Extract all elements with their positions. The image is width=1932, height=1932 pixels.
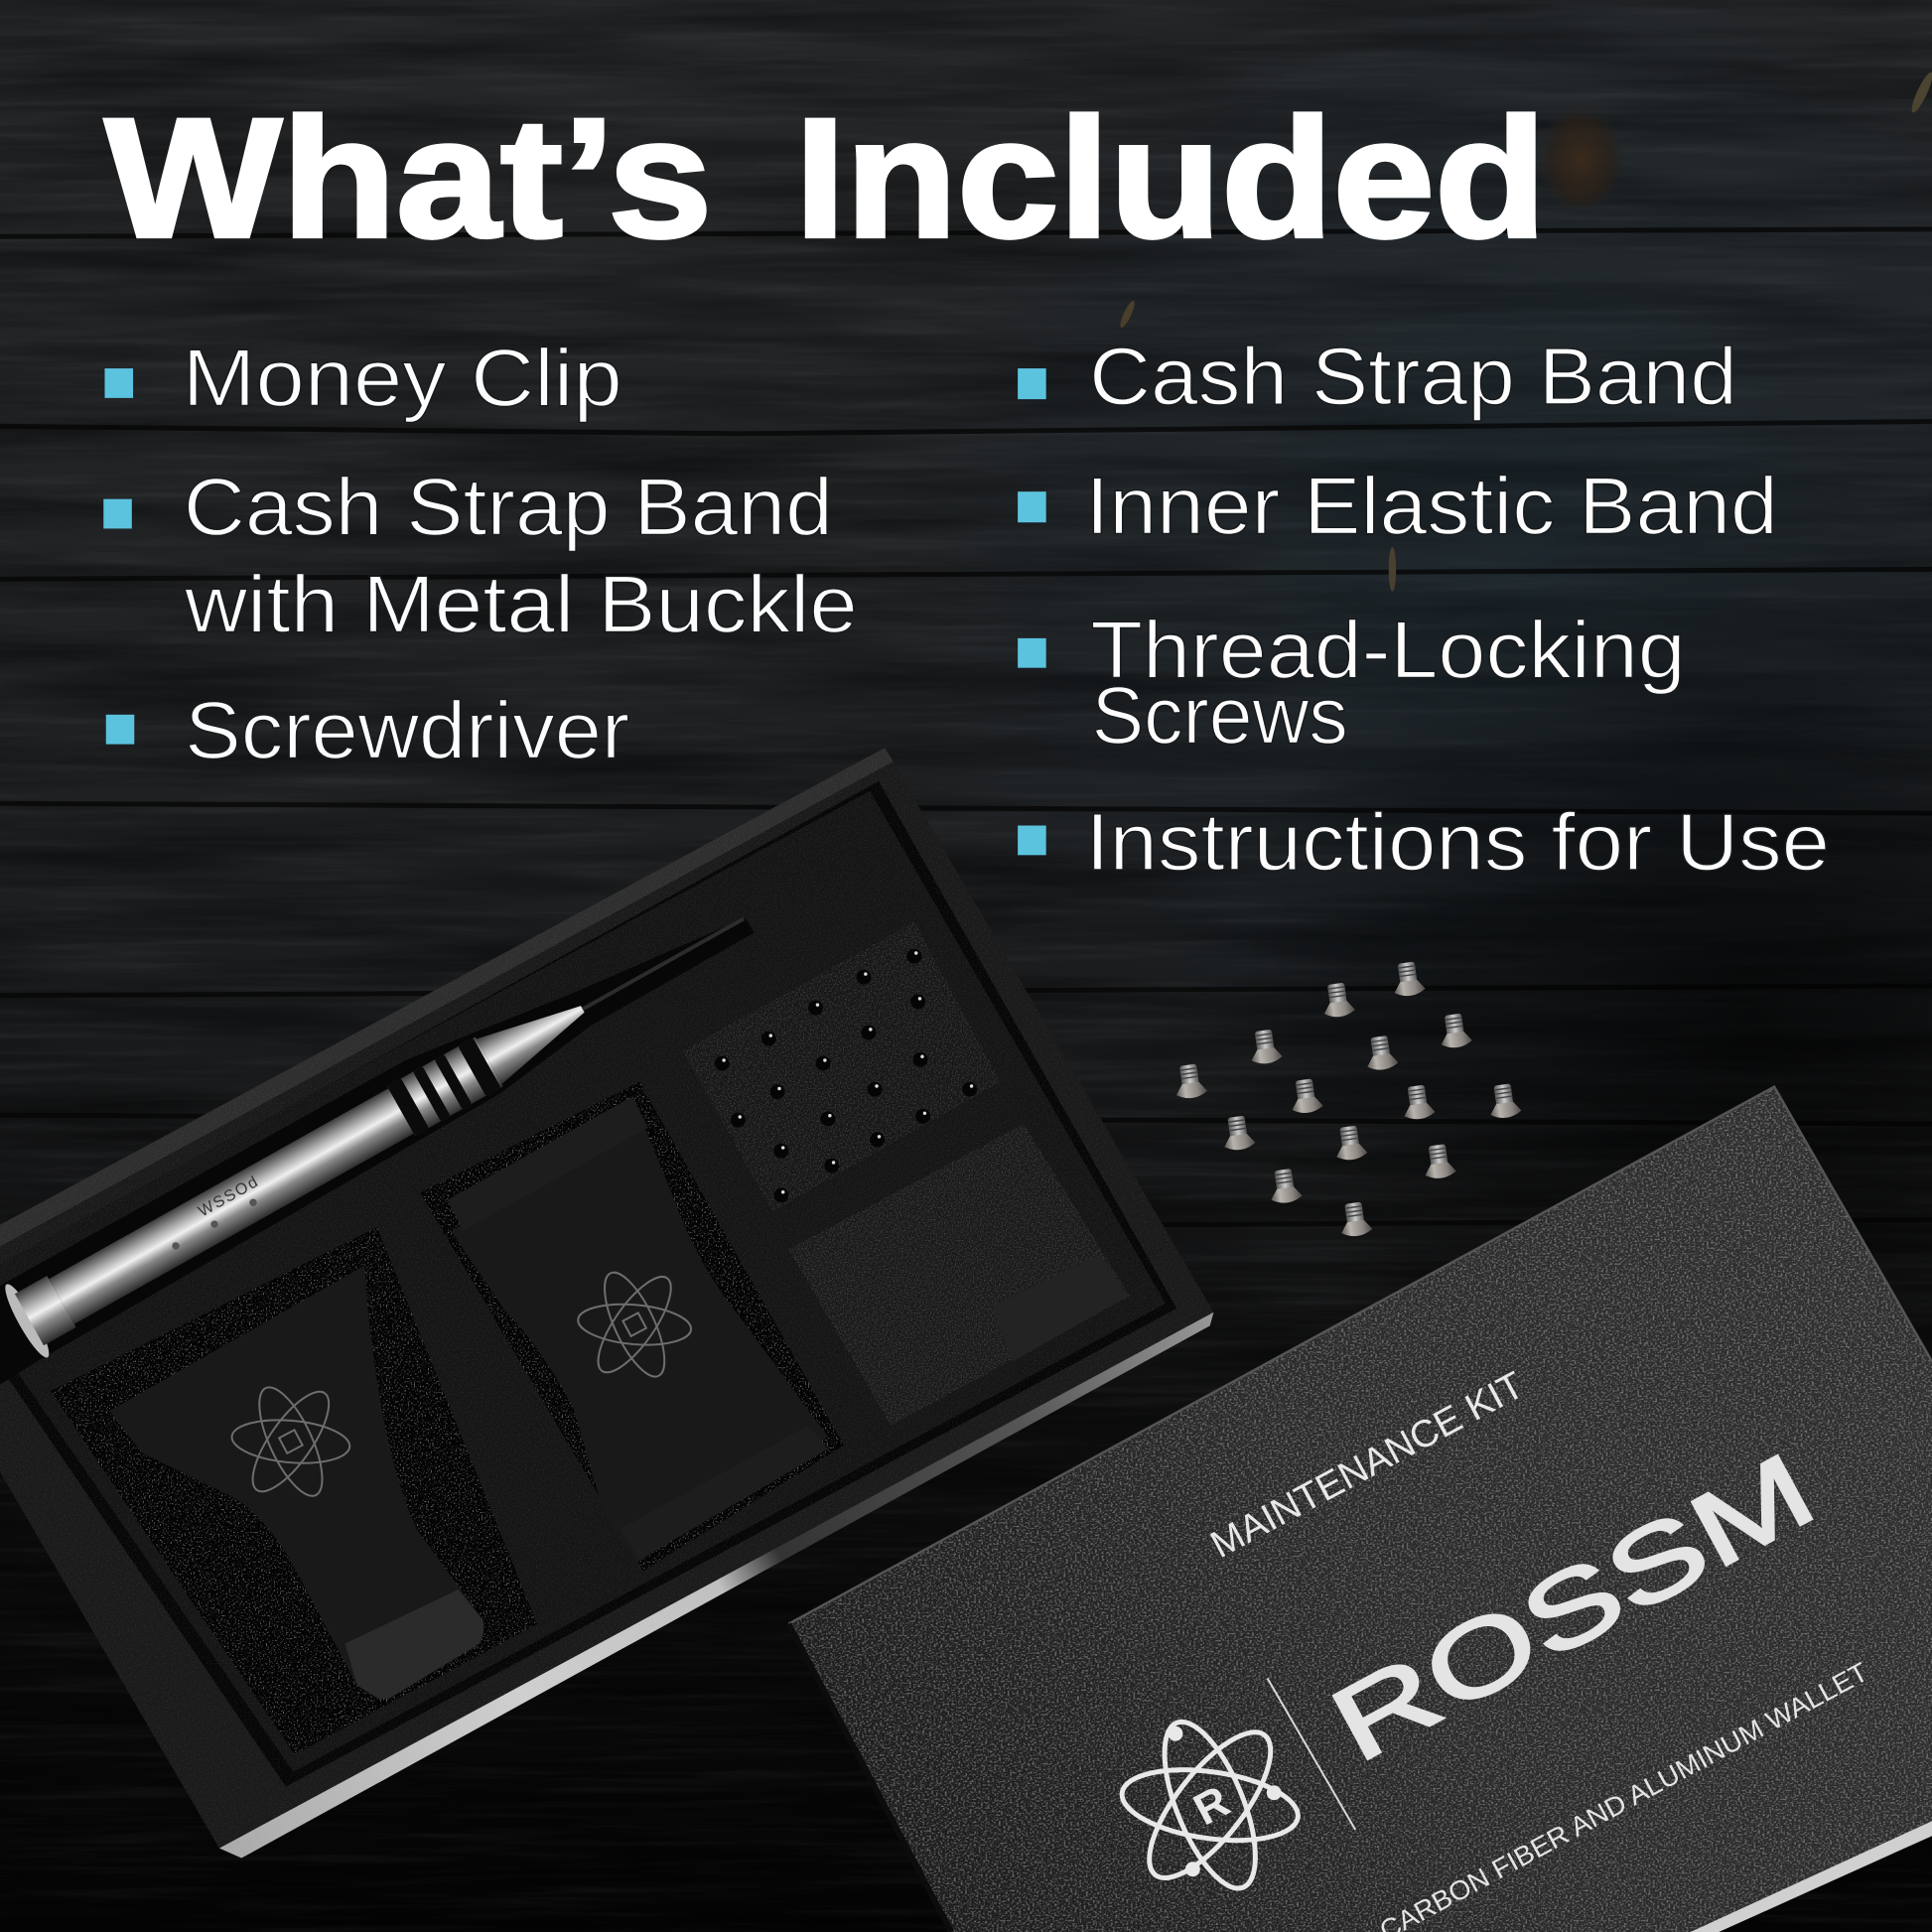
screwdriver slot — [0, 918, 755, 1392]
lid logo: wordmark: ROSSM — [1313, 1432, 1833, 1784]
cash strap bottom band — [620, 1426, 828, 1560]
item: Cash Strap Band: Cash Strap Band — [1089, 332, 1737, 422]
item: Cash Strap Band with Metal Buckle — [103, 463, 858, 650]
glitter foam — [50, 1072, 850, 1762]
item: Cash Strap Band with Metal Buckle: with Metal Buckle — [184, 560, 858, 650]
item: Instructions for Use: Instructions for Use — [1085, 797, 1830, 888]
lid atom logo — [1118, 1711, 1303, 1900]
dotted grip pad studs — [715, 949, 977, 1202]
money clip 2 — [448, 1097, 828, 1564]
money clip 1 — [109, 1266, 483, 1699]
engraved model text: WSSOd — [196, 1173, 262, 1220]
fabric texture — [444, 918, 1134, 1571]
item: Thread-Locking Screws: Screws — [1092, 670, 1348, 760]
pocket cavity upper — [683, 921, 1001, 1211]
title: Included — [794, 83, 1547, 273]
item: Inner Elastic Band: Inner Elastic Band — [1085, 461, 1778, 551]
lid top edge — [788, 1087, 1932, 1624]
box lid — [776, 1072, 1932, 1932]
atom emboss — [577, 1265, 693, 1384]
lid corner highlight — [1691, 1821, 1932, 1932]
item: Cash Strap Band with Metal Buckle: Cash Strap Band — [184, 463, 833, 553]
title — [104, 83, 1547, 273]
item: Money Clip: Money Clip — [183, 333, 622, 423]
foam insert — [0, 740, 1232, 1872]
lid atom logo: R — [1186, 1777, 1237, 1835]
clip cavity left — [51, 1227, 537, 1754]
folded inner elastic band loop — [993, 1254, 1128, 1361]
bullet list: left column — [103, 333, 858, 775]
clip cavity middle — [420, 1082, 844, 1571]
lid text: maintenance kit: MAINTENANCE KIT — [1204, 1364, 1531, 1567]
atom emboss — [230, 1379, 351, 1504]
screwdriver — [0, 883, 764, 1361]
pocket cavity lower — [802, 1132, 1120, 1420]
item: Thread-Locking Screws — [1018, 606, 1686, 760]
item: Thread-Locking Screws: Thread-Locking — [1090, 606, 1686, 696]
lid divider — [1268, 1678, 1355, 1830]
item: Screwdriver: Screwdriver — [185, 685, 629, 775]
cash strap top band — [448, 1097, 648, 1231]
title: What’s — [104, 83, 712, 273]
loose thread-locking screws — [1173, 961, 1522, 1238]
lid left edge — [788, 1624, 951, 1932]
open box with kit contents — [0, 740, 1232, 1872]
bullet list: right column — [1018, 332, 1830, 888]
box walls — [0, 748, 1213, 1849]
box rim highlight — [219, 1312, 1213, 1859]
